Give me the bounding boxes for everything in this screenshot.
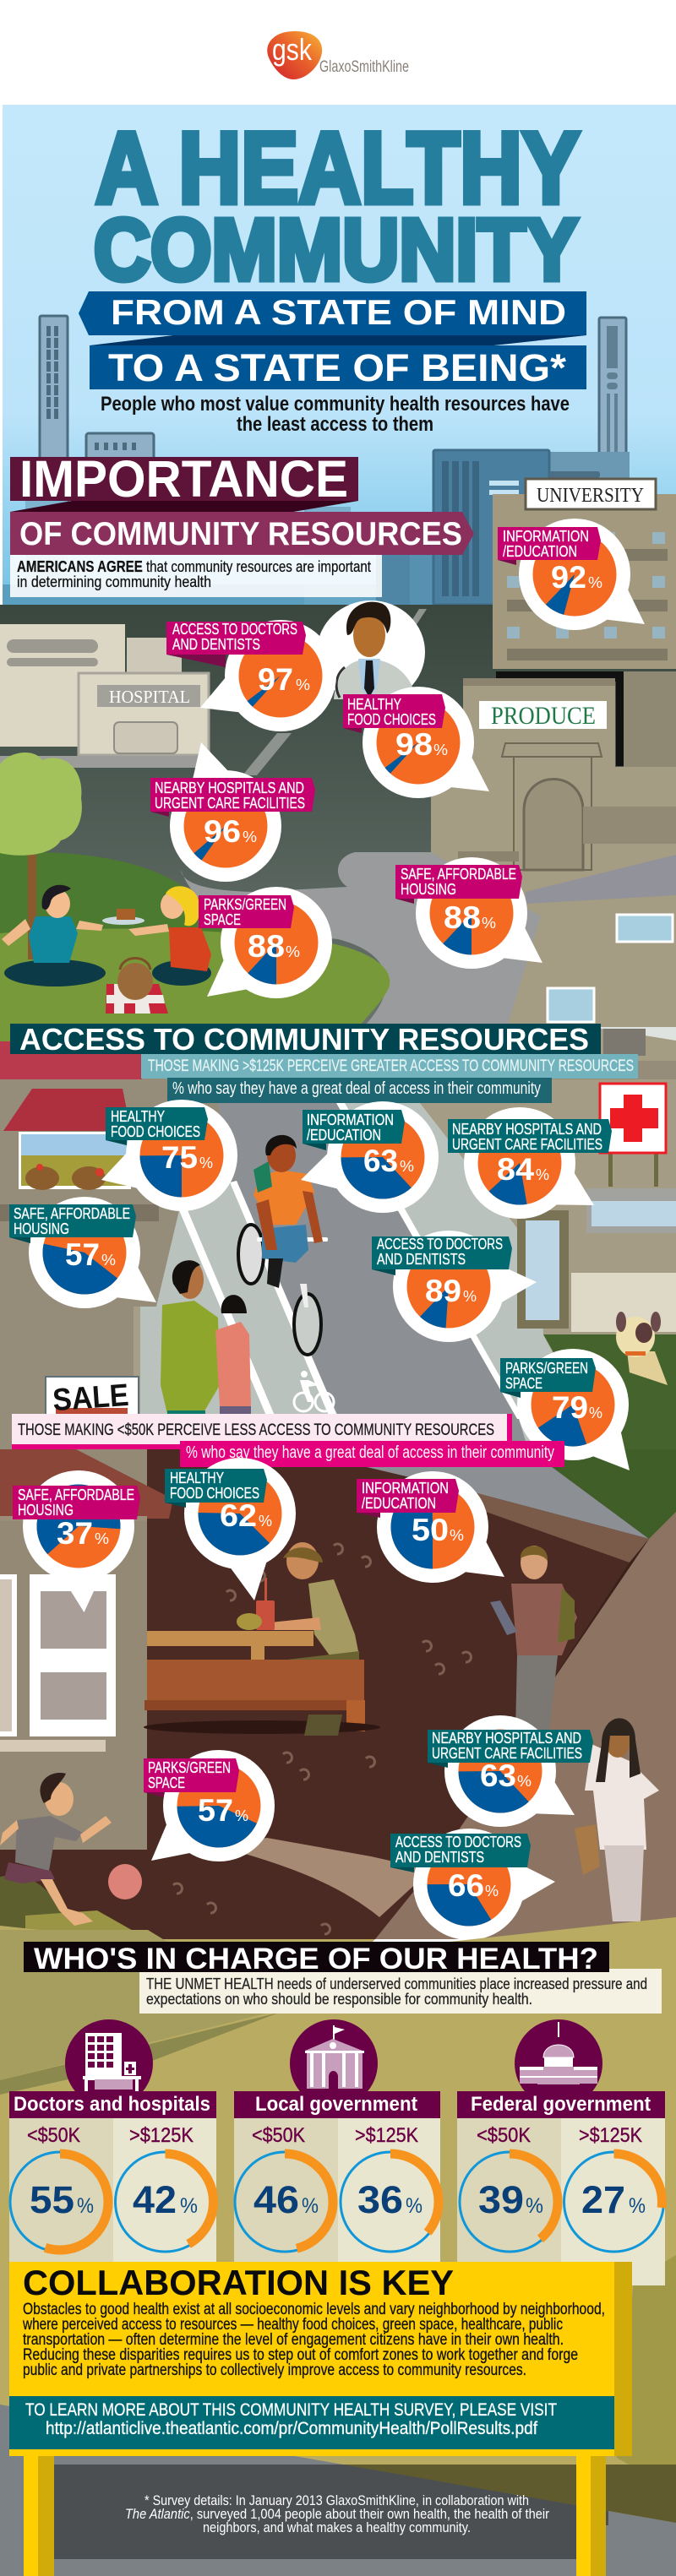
table and bench xyxy=(144,1631,380,1734)
ball xyxy=(108,1864,142,1899)
callout: healthy food 98%: % xyxy=(433,742,448,758)
ring: 42% xyxy=(115,2152,215,2252)
callout: information/education 92% xyxy=(498,519,645,630)
label: SPACE xyxy=(505,1375,542,1392)
skyline buildings xyxy=(3,316,630,605)
panel: federal government: <$50K xyxy=(477,2124,531,2147)
footprints xyxy=(173,1544,471,1934)
panel: local government: <$50K xyxy=(252,2124,305,2147)
boy on picnic xyxy=(2,885,106,986)
callout: safe housing 57%: % xyxy=(101,1252,116,1269)
callout: safe housing 37%: % xyxy=(95,1530,109,1547)
callout: nearby hospitals 84%: 84 xyxy=(497,1152,534,1187)
callout: safe housing 57% xyxy=(9,1197,156,1308)
label: AND DENTISTS xyxy=(377,1251,466,1268)
label: FOOD CHOICES xyxy=(170,1485,259,1502)
label: NEARBY HOSPITALS AND xyxy=(432,1730,581,1747)
pie: 88% xyxy=(235,900,318,985)
label: ACCESS TO DOCTORS xyxy=(172,621,297,638)
label: SAFE, AFFORDABLE xyxy=(14,1205,130,1222)
ring: 36%: 36 xyxy=(357,2178,403,2221)
label: INFORMATION xyxy=(503,528,589,545)
for sale sign xyxy=(46,1377,139,1449)
building: hospital xyxy=(0,624,209,768)
running kid xyxy=(0,1773,112,1926)
label: SAFE, AFFORDABLE xyxy=(401,866,516,883)
sign: hospital: HOSPITAL xyxy=(109,687,190,707)
callout: information/education 63%: 63 xyxy=(363,1144,398,1178)
shop with awning xyxy=(3,1089,131,1190)
callout: nearby hospitals 63%: % xyxy=(517,1773,532,1790)
pie: 75% xyxy=(140,1113,223,1198)
callout: nearby hospitals 96% xyxy=(150,742,315,882)
intro text xyxy=(101,393,570,436)
label xyxy=(448,1119,612,1153)
subtitle banner: TO A STATE OF BEING* xyxy=(108,346,567,389)
tree xyxy=(0,753,82,959)
plate with cake xyxy=(102,909,144,925)
intro text: People who most value community health resources have xyxy=(101,393,570,416)
label xyxy=(372,1236,512,1275)
label: URGENT CARE FACILITIES xyxy=(432,1745,582,1762)
text box: unmet health xyxy=(139,1969,662,2014)
callout: nearby hospitals 96%: 96 xyxy=(204,814,241,849)
label: FOOD CHOICES xyxy=(111,1123,200,1140)
girl walking xyxy=(575,1718,659,1921)
subtitle banner: FROM A STATE OF MIND xyxy=(111,292,566,332)
callout: safe housing 37%: 37 xyxy=(57,1516,93,1551)
ring: 55% xyxy=(10,2152,110,2252)
sky background xyxy=(3,105,676,605)
label xyxy=(357,1479,459,1518)
pie: 62% xyxy=(198,1471,282,1556)
label: HEALTHY xyxy=(111,1108,165,1125)
callout: safe housing 88%: 88 xyxy=(444,900,481,935)
label xyxy=(390,1834,531,1872)
callout: doctors and dentists 66%: % xyxy=(485,1883,499,1899)
label: INFORMATION xyxy=(362,1480,449,1497)
label: AND DENTISTS xyxy=(172,636,260,653)
sign: university xyxy=(526,479,656,509)
panel: local government: >$125K xyxy=(355,2124,418,2147)
building: university xyxy=(493,479,676,767)
label: URGENT CARE FACILITIES xyxy=(452,1136,602,1153)
label xyxy=(106,1107,208,1145)
label: HOUSING xyxy=(401,881,456,898)
hill and kid with ball xyxy=(0,1773,148,1939)
callout: information/education 92%: % xyxy=(588,574,602,591)
ring: 36% xyxy=(341,2152,440,2252)
subtitle banner xyxy=(79,291,586,389)
label: AND DENTISTS xyxy=(395,1849,484,1866)
panel: collaboration is key: COLLABORATION IS KEY xyxy=(23,2263,454,2302)
label xyxy=(498,527,601,565)
for sale sign: SALE xyxy=(52,1378,130,1417)
callout: healthy food 98% xyxy=(343,687,489,798)
heading: importance xyxy=(10,450,474,555)
ring: 55%: % xyxy=(77,2194,94,2218)
survey footnote: neighbors, and what makes a healthy community. xyxy=(203,2520,471,2535)
label: PARKS/GREEN xyxy=(148,1759,231,1776)
paragraph: where perceived access to resources — healthy food choices, green space, healthcare, public xyxy=(22,2316,563,2334)
label: /EDUCATION xyxy=(307,1127,381,1144)
pie: 66% xyxy=(428,1843,510,1926)
ring: 27%: 27 xyxy=(581,2178,625,2221)
sign: university: UNIVERSITY xyxy=(537,485,644,507)
pie: 63% xyxy=(458,1730,542,1812)
pie: 88% xyxy=(429,872,514,954)
callout: doctors and dentists 66% xyxy=(390,1829,555,1940)
callout: healthy food 75% xyxy=(101,1100,237,1211)
callout: doctors and dentists 89%: 89 xyxy=(425,1274,461,1308)
label: SPACE xyxy=(204,911,241,928)
label xyxy=(428,1730,593,1768)
banner: those making over 125K xyxy=(10,1022,638,1103)
pie: 96% xyxy=(184,784,267,868)
callout: doctors and dentists 89%: % xyxy=(463,1288,477,1305)
cross sign xyxy=(600,1084,666,1187)
label: FOOD CHOICES xyxy=(347,711,436,728)
man eating at table xyxy=(237,1542,359,1736)
callout: healthy food 62% xyxy=(165,1458,296,1600)
callout: safe housing 88%: % xyxy=(482,915,496,932)
road: importance section xyxy=(181,852,541,1027)
house right xyxy=(517,1188,676,1332)
dog xyxy=(616,1312,668,1385)
ring: 42%: 42 xyxy=(133,2178,177,2221)
callout: nearby hospitals 63% xyxy=(428,1715,593,1827)
logo: GlaxoSmithKline: GlaxoSmithKline xyxy=(319,58,409,76)
callout: healthy food 75%: % xyxy=(199,1155,213,1171)
callout: information/education 92%: 92 xyxy=(551,560,586,595)
label xyxy=(343,694,445,733)
grass right xyxy=(543,1334,676,1539)
label: /EDUCATION xyxy=(362,1495,436,1512)
ring: 27% xyxy=(564,2152,664,2252)
callout: information/education 50%: 50 xyxy=(412,1513,449,1547)
callout: safe housing 57%: 57 xyxy=(65,1237,100,1272)
callout: information/education 50% xyxy=(357,1471,504,1583)
pie: 57% xyxy=(42,1211,127,1294)
callout: doctors and dentists 66%: 66 xyxy=(448,1868,484,1903)
panel: doctors and hospitals: <$50K xyxy=(27,2124,80,2147)
callout: doctors and dentists 89% xyxy=(372,1231,537,1342)
callout: healthy food 62%: % xyxy=(259,1513,272,1530)
label xyxy=(9,1204,136,1243)
text box: Americans agree: AMERICANS AGREE that community resources are important xyxy=(17,558,371,575)
ring: 46%: 46 xyxy=(254,2178,299,2221)
ring: 39%: % xyxy=(526,2194,543,2218)
cyclist xyxy=(238,1135,328,1355)
sign posts xyxy=(24,2454,606,2576)
ring: 46%: % xyxy=(302,2194,319,2218)
callout: nearby hospitals 96%: % xyxy=(243,829,257,845)
pie: 84% xyxy=(478,1122,561,1204)
lower neighborhood background xyxy=(0,1449,676,1939)
banner: those making over 125K: ACCESS TO COMMUNITY RESOURCES xyxy=(19,1022,589,1057)
icon: town hall xyxy=(290,2019,378,2107)
callout: parks 88%: 88 xyxy=(248,929,285,964)
title: A HEALTHY xyxy=(95,111,580,225)
callout: doctors and dentists 97%: % xyxy=(296,677,310,693)
panel: doctors and hospitals: >$125K xyxy=(129,2124,194,2147)
call to action strip: TO LEARN MORE ABOUT THIS COMMUNITY HEALTH SURVEY, PLEASE VISIT xyxy=(25,2400,557,2420)
callout: parks 57%: 57 xyxy=(198,1793,233,1828)
banner: those making over 125K: % who say they have a great deal of access in their community xyxy=(172,1079,541,1098)
bike lane symbol xyxy=(294,1371,334,1411)
survey footnote xyxy=(125,2493,549,2535)
pie: 50% xyxy=(390,1485,475,1569)
label: PARKS/GREEN xyxy=(505,1360,588,1377)
man and woman walking xyxy=(161,1260,251,1449)
label: INFORMATION xyxy=(307,1111,394,1128)
ring: 36%: % xyxy=(406,2194,422,2218)
heading: importance: OF COMMUNITY RESOURCES xyxy=(19,516,462,552)
doctor illustration xyxy=(317,601,425,704)
banner: those making under 50K: THOSE MAKING <$50K PERCEIVE LESS ACCESS TO COMMUNITY RESOURCES xyxy=(18,1421,494,1439)
label: /EDUCATION xyxy=(503,543,577,560)
label xyxy=(13,1486,140,1519)
label: ACCESS TO DOCTORS xyxy=(377,1236,503,1253)
pie: 89% xyxy=(407,1245,490,1328)
callout: parks 88% xyxy=(199,887,332,998)
callout: safe housing 37% xyxy=(13,1470,140,1612)
label: HEALTHY xyxy=(170,1470,224,1486)
callout: nearby hospitals 63%: 63 xyxy=(480,1758,516,1793)
ring: 42%: % xyxy=(180,2194,198,2218)
icon: capitol xyxy=(515,2019,602,2107)
logo: GlaxoSmithKline xyxy=(267,31,409,79)
heading: who's in charge: WHO'S IN CHARGE OF OUR HEALTH? xyxy=(34,1943,598,1975)
callout: information/education 63%: % xyxy=(400,1158,414,1175)
callout: parks 88%: % xyxy=(286,943,300,960)
ring: 39% xyxy=(460,2152,559,2252)
panel: doctors and hospitals xyxy=(9,2091,216,2264)
panel: federal government xyxy=(457,2091,665,2285)
callout: information/education 63% xyxy=(301,1101,439,1213)
text box: Americans agree: in determining community health xyxy=(17,573,211,590)
label: URGENT CARE FACILITIES xyxy=(155,795,305,812)
callout: nearby hospitals 84% xyxy=(448,1107,612,1219)
pie: 79% xyxy=(531,1363,615,1446)
paragraph: Reducing these disparities requires us to step out of comfort zones to work together and forge xyxy=(23,2346,578,2364)
callout: parks 79% xyxy=(500,1349,630,1470)
banner: those making under 50K xyxy=(12,1414,564,1467)
label: PARKS/GREEN xyxy=(204,896,286,913)
label xyxy=(144,1758,239,1797)
paragraph: transportation — often determine the level of engagement citizens have in their own health. xyxy=(23,2331,564,2349)
title xyxy=(94,111,580,298)
ring: 55%: 55 xyxy=(30,2178,74,2221)
callout: nearby hospitals 84%: % xyxy=(536,1166,549,1183)
label xyxy=(303,1110,405,1150)
callout: parks 79%: % xyxy=(589,1405,602,1421)
label: HOUSING xyxy=(14,1220,69,1237)
panel: local government: Local government xyxy=(255,2093,417,2116)
callout: information/education 50%: % xyxy=(450,1527,464,1544)
label: ACCESS TO DOCTORS xyxy=(395,1834,521,1850)
ring: 39%: 39 xyxy=(478,2178,524,2221)
callout: healthy food 62%: 62 xyxy=(220,1498,257,1533)
paragraph: public and private partnerships to collectively improve access to community resources. xyxy=(23,2361,526,2379)
pie: 98% xyxy=(377,701,460,784)
label xyxy=(150,778,315,817)
panel: federal government: Federal government xyxy=(471,2093,651,2116)
building: produce market xyxy=(431,678,676,1027)
pie: 97% xyxy=(238,633,323,718)
pie: 63% xyxy=(341,1115,424,1199)
label xyxy=(395,865,522,904)
panel: collaboration is key xyxy=(9,2262,632,2456)
call to action strip: http://atlanticlive.theatlantic.com/pr/CommunityHealth/PollResults.pdf xyxy=(46,2419,537,2438)
label xyxy=(199,895,294,928)
label: HEALTHY xyxy=(347,696,401,713)
footer gray ground xyxy=(0,2405,676,2576)
ring: 27%: % xyxy=(629,2194,646,2218)
ground behind hospital xyxy=(0,605,676,1027)
pie: 37% xyxy=(37,1485,120,1568)
label xyxy=(500,1358,596,1398)
intro text: the least access to them xyxy=(237,413,433,436)
banner: those making under 50K: % who say they have a great deal of access in their community xyxy=(186,1443,554,1462)
label: SAFE, AFFORDABLE xyxy=(18,1486,134,1503)
label: SPACE xyxy=(148,1774,185,1791)
callout: doctors and dentists 97%: 97 xyxy=(258,662,293,697)
panel: federal government: >$125K xyxy=(579,2124,642,2147)
text box: unmet health: expectations on who should be responsible for community health. xyxy=(146,1991,532,2008)
access section background xyxy=(0,1027,676,1539)
pie: 57% xyxy=(177,1764,260,1848)
survey footnote: * Survey details: In January 2013 GlaxoSmithKline, in collaboration with xyxy=(144,2493,529,2508)
heading: importance: IMPORTANCE xyxy=(19,450,348,508)
callout: safe housing 88% xyxy=(395,857,542,969)
callout: healthy food 75%: 75 xyxy=(161,1140,198,1175)
pie: 92% xyxy=(532,532,617,617)
panel: local government xyxy=(234,2091,440,2264)
title: COMMUNITY xyxy=(94,201,578,298)
house left xyxy=(0,1449,173,1850)
label: HOUSING xyxy=(18,1502,74,1519)
text box: Americans agree xyxy=(10,555,382,597)
callout: parks 79%: 79 xyxy=(552,1390,588,1425)
picnic blanket and basket xyxy=(106,958,168,1014)
sign: produce: PRODUCE xyxy=(491,702,596,730)
callout: parks 57%: % xyxy=(235,1807,248,1824)
logo: GlaxoSmithKline: gsk xyxy=(272,32,313,67)
call to action strip xyxy=(9,2396,614,2449)
road and bike lanes xyxy=(134,1103,676,1539)
olive background, who's in charge section xyxy=(0,1917,676,2525)
green hill and picnic xyxy=(0,753,390,1027)
label xyxy=(165,1469,267,1508)
ring: 46% xyxy=(235,2152,335,2252)
icon: hospital xyxy=(65,2019,153,2107)
callout: doctors and dentists 97% xyxy=(166,620,336,731)
paragraph xyxy=(22,2301,605,2379)
girl on picnic xyxy=(128,886,211,986)
callout: parks 57% xyxy=(144,1750,275,1861)
callout: healthy food 98%: 98 xyxy=(395,727,433,762)
label xyxy=(166,621,306,667)
panel: doctors and hospitals: Doctors and hospitals xyxy=(14,2093,210,2116)
survey footnote: The Atlantic, surveyed 1,004 people about their own health, the health of their xyxy=(125,2507,549,2522)
student with tablet xyxy=(490,1546,577,1731)
label: NEARBY HOSPITALS AND xyxy=(452,1121,602,1138)
label: NEARBY HOSPITALS AND xyxy=(155,780,304,796)
